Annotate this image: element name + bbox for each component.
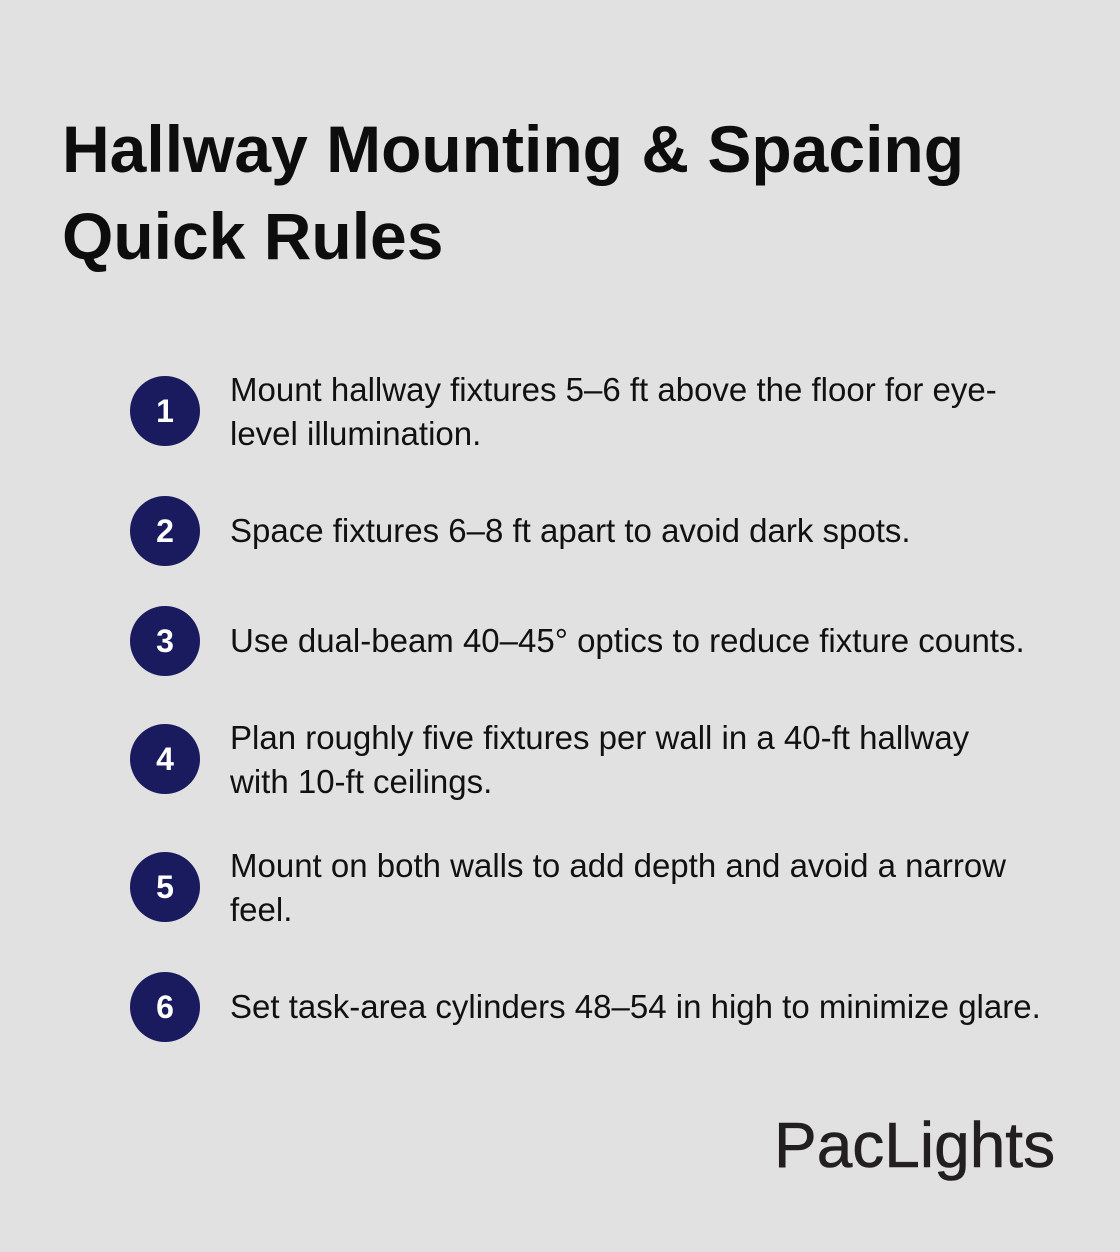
badge 6: 6 [156,989,174,1025]
text 5: Mount on both walls to add depth and avoid a narrow [230,847,1006,884]
text 5: feel. [230,891,292,928]
item 1 [130,371,997,452]
badge 5 [130,852,200,922]
item 2 [130,496,911,566]
badge 3 [130,606,200,676]
badge 4 [130,724,200,794]
text 4 [230,719,969,800]
badge 1 [130,376,200,446]
text 4: Plan roughly five fixtures per wall in a 40-ft hallway [230,719,969,756]
badge 2 [130,496,200,566]
badge 6 [130,972,200,1042]
title: Hallway Mounting & Spacing [62,112,964,186]
text 2: Space fixtures 6–8 ft apart to avoid dark spots. [230,512,911,549]
text 6: Set task-area cylinders 48–54 in high to minimize glare. [230,988,1041,1025]
text 5 [230,847,1006,928]
text 4: with 10-ft ceilings. [230,763,492,800]
text 3: Use dual-beam 40–45° optics to reduce fixture counts. [230,622,1025,659]
badge 2: 2 [156,513,174,549]
badge 1: 1 [156,393,174,429]
item 5 [130,847,1006,928]
badge 3: 3 [156,623,174,659]
badge 4: 4 [156,741,174,777]
text 1: Mount hallway fixtures 5–6 ft above the floor for eye- [230,371,997,408]
title: Quick Rules [62,199,443,273]
item 6 [130,972,1041,1042]
item 3 [130,606,1025,676]
logo: PacLights [774,1109,1055,1181]
badge 5: 5 [156,869,174,905]
title [62,112,964,273]
text 1 [230,371,997,452]
item 4 [130,719,969,800]
text 1: level illumination. [230,415,481,452]
